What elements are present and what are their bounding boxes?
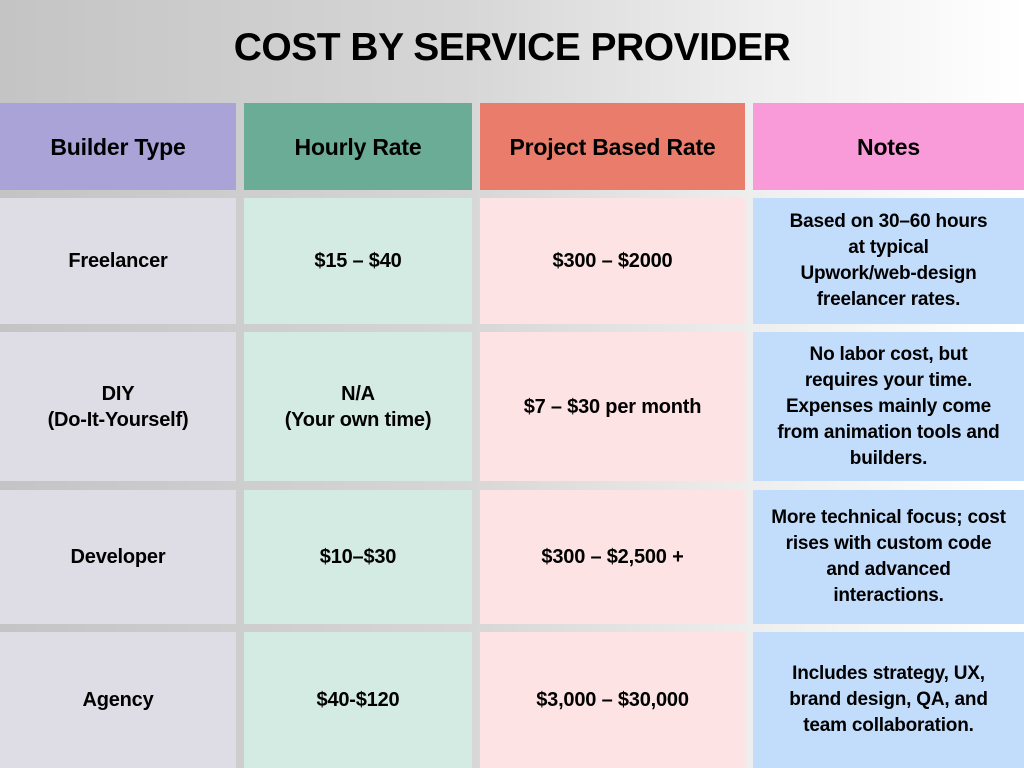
header: notes: Notes	[857, 134, 920, 160]
row: freelancer: $15 – $40	[314, 250, 402, 272]
row: agency: Agency	[82, 689, 154, 711]
row: developer: rises with custom code	[786, 533, 991, 554]
header: hourly rate	[244, 103, 472, 190]
title: COST BY SERVICE PROVIDER	[234, 26, 790, 69]
row: agency: $40-$120	[317, 689, 399, 711]
header: notes	[753, 103, 1024, 190]
row: freelancer: $300 – $2000	[553, 250, 672, 272]
row: developer	[0, 490, 1024, 624]
header: project based rate: Project Based Rate	[509, 134, 716, 160]
row: developer: More technical focus; cost	[771, 507, 1006, 528]
row: DIY: (Your own time)	[285, 408, 431, 430]
header: builder type	[0, 103, 236, 190]
row: DIY: DIY	[102, 382, 134, 404]
row: developer: interactions.	[833, 585, 944, 606]
row: DIY: requires your time.	[805, 370, 972, 390]
row: freelancer: freelancer rates.	[817, 289, 960, 310]
row: DIY: builders.	[850, 448, 927, 468]
row: freelancer: Upwork/web-design	[800, 263, 977, 284]
row: agency	[0, 632, 1024, 768]
row: DIY	[0, 332, 1024, 481]
row: developer: $10–$30	[320, 546, 396, 568]
row: freelancer: at typical	[848, 237, 929, 258]
row: agency: Includes strategy, UX,	[792, 663, 985, 684]
row: DIY: (Do-It-Yourself)	[48, 408, 188, 430]
row: freelancer	[0, 198, 1024, 324]
row: agency: brand design, QA, and	[789, 689, 988, 710]
header: builder type: Builder Type	[50, 134, 186, 160]
row: agency: team collaboration.	[803, 715, 974, 736]
header: hourly rate: Hourly Rate	[295, 134, 421, 160]
row: DIY: from animation tools and	[777, 422, 1000, 442]
row: developer: $300 – $2,500 +	[541, 546, 684, 568]
row: DIY: $7 – $30 per month	[524, 396, 701, 418]
row: DIY: N/A	[341, 382, 375, 404]
row: DIY: No labor cost, but	[810, 344, 967, 364]
row: freelancer: Freelancer	[68, 250, 168, 272]
row: developer: and advanced	[826, 559, 951, 580]
header: project based rate	[480, 103, 745, 190]
row: agency: $3,000 – $30,000	[536, 689, 689, 711]
row: developer: Developer	[71, 546, 165, 568]
row: freelancer: Based on 30–60 hours	[790, 211, 987, 232]
row: DIY: Expenses mainly come	[786, 396, 991, 416]
